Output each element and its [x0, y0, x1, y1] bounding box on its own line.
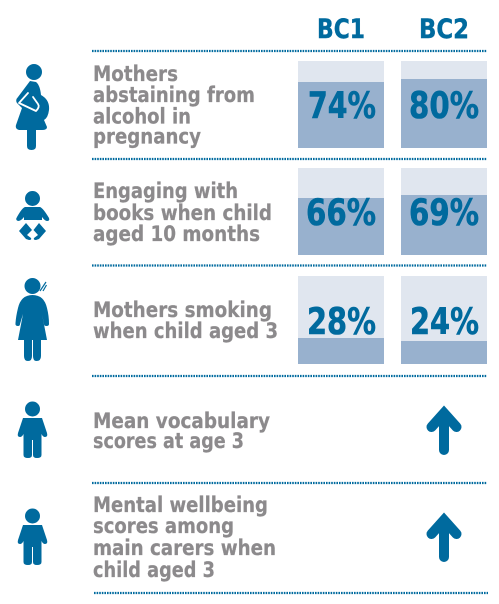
arrow: vocabulary up	[432, 413, 456, 450]
bar: BC1 books 66%: 66%	[306, 191, 376, 234]
icon: pregnant woman	[16, 64, 49, 150]
bar: BC1 alcohol 74%	[298, 61, 384, 148]
text: mean vocabulary: scores at age 3	[93, 429, 244, 454]
bar: BC1 smoking 28%	[298, 276, 384, 364]
bar: BC2 alcohol 80%: 80%	[409, 84, 479, 127]
column heading: BC1: BC1	[317, 14, 365, 45]
text: mental wellbeing: Mental wellbeing	[93, 493, 268, 518]
text: engaging with books: Engaging with	[93, 179, 238, 204]
column heading: BC2: BC2	[419, 14, 469, 45]
bar: BC2 books 69%: 69%	[409, 191, 479, 234]
arrow: wellbeing up	[432, 520, 456, 557]
text: mothers abstaining from alcohol: pregnancy	[93, 124, 201, 150]
bar: BC1 books 66%	[298, 168, 384, 255]
text: mental wellbeing	[93, 493, 276, 583]
icon: child	[18, 402, 47, 458]
bar: BC2 alcohol 80%	[401, 61, 487, 148]
text: mental wellbeing: child aged 3	[93, 558, 215, 583]
text: engaging with books	[93, 179, 272, 247]
text: mothers smoking	[93, 298, 278, 344]
bar: BC1 smoking 28%: 28%	[307, 300, 376, 343]
bar: BC1 alcohol 74%: 74%	[308, 84, 376, 127]
text: mothers smoking: when child aged 3	[93, 319, 278, 344]
icon: baby	[16, 191, 49, 240]
text: mental wellbeing: main carers when	[93, 536, 276, 561]
text: mothers smoking: Mothers smoking	[93, 298, 272, 323]
bar: BC2 smoking 24%	[401, 276, 487, 364]
bar: BC2 smoking 24%: 24%	[410, 300, 479, 343]
bar: BC2 books 69%	[401, 168, 487, 255]
text: mothers abstaining from alcohol: Mothers	[93, 62, 178, 87]
text: mothers abstaining from alcohol: alcohol in	[93, 104, 191, 130]
text: mean vocabulary	[93, 409, 270, 454]
text: mothers abstaining from alcohol	[93, 62, 255, 150]
text: engaging with books: aged 10 months	[93, 222, 260, 247]
text: mental wellbeing: scores among	[93, 514, 234, 539]
text: engaging with books: books when child	[93, 201, 272, 226]
icon: woman smoking	[15, 278, 49, 361]
text: mothers abstaining from alcohol: abstaining from	[93, 83, 255, 108]
text: mean vocabulary: Mean vocabulary	[93, 409, 270, 434]
icon: child	[18, 508, 47, 565]
